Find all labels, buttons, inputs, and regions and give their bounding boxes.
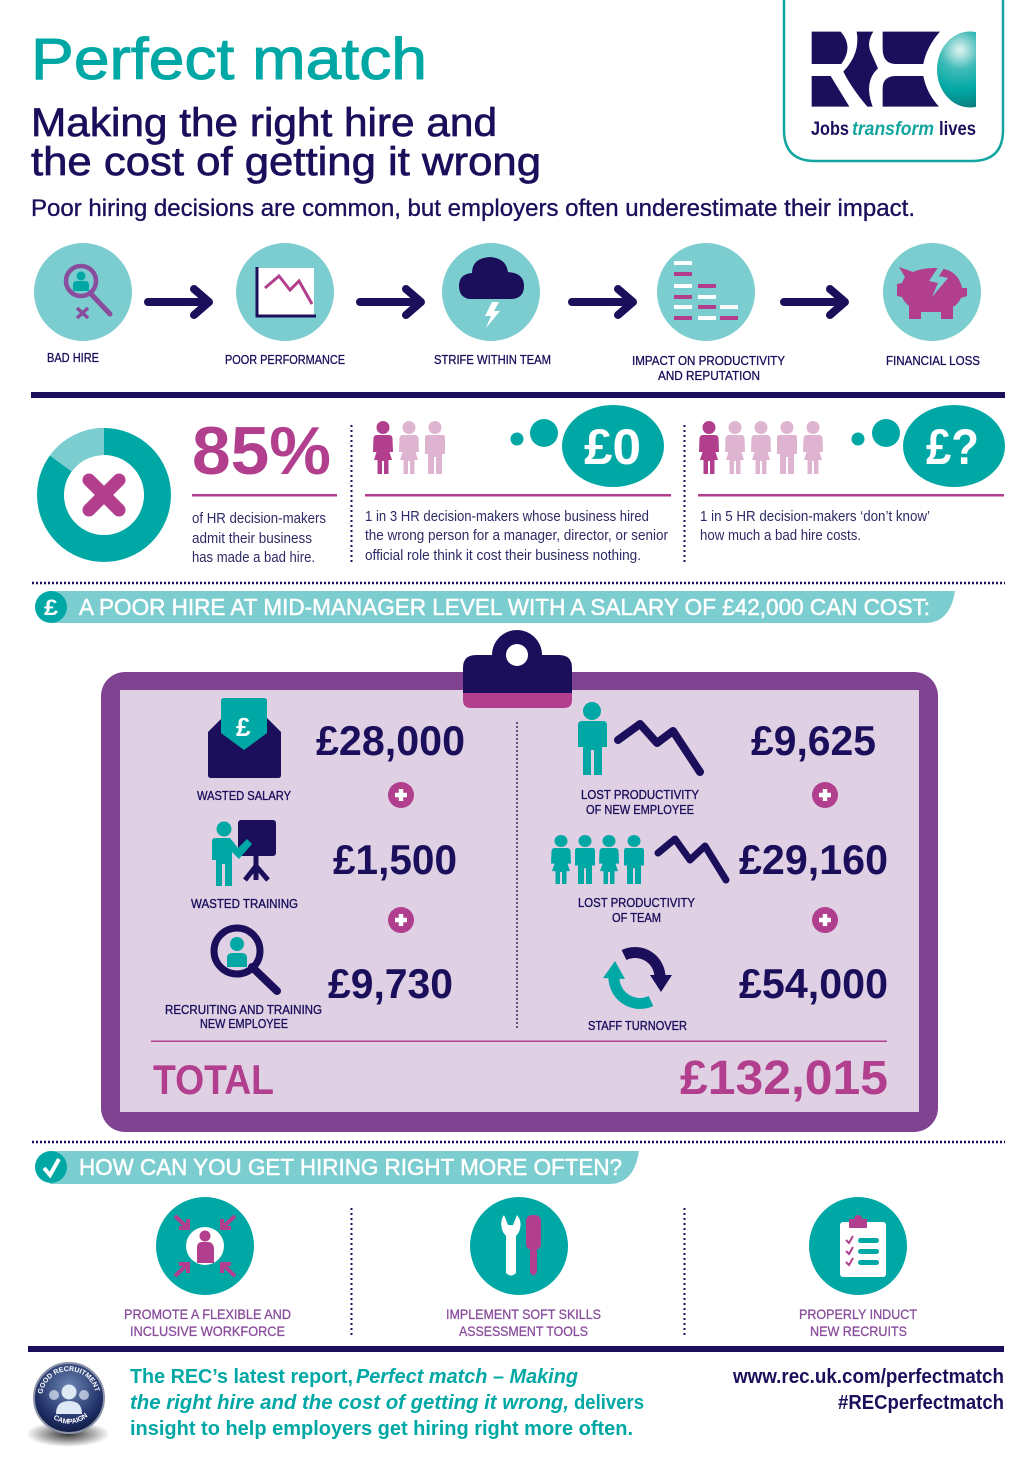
tip: soft skills tools [446,1197,601,1339]
item: lost productivity of team: £29,160 [739,836,888,883]
item: lost productivity of new employee: £9,625 [751,717,876,764]
badge: good recruitment campaign [28,1362,108,1446]
arrow [784,289,845,315]
tip: flexible and inclusive workforce: INCLUSIVE WORKFORCE [130,1323,285,1339]
stat: 1 in 5: how much a bad hire costs. [700,527,861,544]
banner: how to get it right: HOW CAN YOU GET HIRING RIGHT MORE OFTEN? [79,1154,622,1180]
stat: 85%: has made a bad hire. [192,549,315,566]
step: bad hire [34,243,132,365]
arrow [572,289,633,315]
tip: induct new recruits: PROPERLY INDUCT [799,1306,917,1322]
item: lost productivity of team: OF TEAM [612,910,661,925]
item: lost productivity of team [551,835,888,925]
badge: good recruitment campaign: GOOD RECRUITMENT [38,1366,100,1394]
plus [812,782,838,808]
footer links: www.rec.uk.com/perfectmatch [732,1366,1004,1388]
subtitle: Making the right hire and [31,101,497,145]
banner: cost heading: £ [44,595,59,620]
plus [388,907,414,933]
stat: 85% [192,413,337,566]
item: lost productivity of new employee: LOST PRODUCTIVITY [581,787,699,802]
item: lost productivity of new employee [578,702,876,817]
subtitle: the cost of getting it wrong [31,140,541,184]
clipboard board [101,672,938,1132]
total [153,1052,888,1105]
step: financial loss [883,243,981,368]
badge: good recruitment campaign: CAMPAIGN [54,1412,88,1424]
stat: 1 in 3: 1 in 3 HR decision-makers whose business hired [365,508,649,525]
item: lost productivity of team: LOST PRODUCTIVITY [578,895,695,910]
stat: 1 in 3: official role think it cost their business nothing. [365,547,641,564]
footer report text: delivers [574,1392,644,1414]
REC logo [784,0,1003,161]
item: recruiting and training new employee: £9,730 [328,960,453,1007]
footer report text: insight to help employers get hiring right more often. [130,1418,633,1440]
stat: 85%: 85% [192,413,331,489]
banner: cost heading: A POOR HIRE AT MID-MANAGER LEVEL WITH A SALARY OF £42,000 CAN COST: [79,594,930,620]
stat: 1 in 3: £0 [584,419,641,475]
stat: 85%: admit their business [192,530,312,547]
item: recruiting and training new employee [165,928,453,1031]
tip: induct new recruits [799,1197,917,1339]
step: poor performance: POOR PERFORMANCE [225,353,345,367]
stat: 85% donut icon [50,442,158,548]
plus [388,782,414,808]
step: strife within team: STRIFE WITHIN TEAM [434,353,551,367]
panel: clipboard cost breakdown [101,630,938,1132]
REC logo: Jobs [811,119,849,140]
step: financial loss: FINANCIAL LOSS [886,354,980,368]
item: recruiting and training new employee: RECRUITING AND TRAINING [165,1002,322,1017]
title: Perfect match [31,27,427,92]
item: wasted salary [197,698,465,803]
stat: 1 in 5: £? [926,419,979,475]
item: wasted salary: £ [236,712,251,742]
item: staff turnover: STAFF TURNOVER [588,1018,687,1033]
item: wasted training: WASTED TRAINING [191,896,298,911]
clipboard clip [463,630,572,708]
tip: soft skills tools: ASSESSMENT TOOLS [459,1323,588,1339]
step: impact on productivity and reputation: IMPACT ON PRODUCTIVITY [632,354,786,368]
item: wasted salary: £28,000 [316,717,465,764]
step: poor performance [225,243,345,367]
item: recruiting and training new employee: NEW EMPLOYEE [200,1016,288,1031]
tip: flexible and inclusive workforce [124,1197,291,1339]
item: wasted salary: WASTED SALARY [197,788,291,803]
REC logo: lives [939,119,976,140]
total: £132,015 [680,1052,888,1105]
tip: soft skills tools: IMPLEMENT SOFT SKILLS [446,1306,601,1322]
footer links [732,1366,1004,1414]
stat: 1 in 5: 1 in 5 HR decision-makers ‘don’t know’ [700,508,930,525]
step: impact on productivity and reputation [632,243,786,383]
item: wasted training [191,820,457,911]
total: TOTAL [153,1056,274,1103]
step: strife within team [434,243,551,367]
step: bad hire: BAD HIRE [47,351,99,365]
tip: flexible and inclusive workforce: PROMOTE A FLEXIBLE AND [124,1306,291,1322]
footer links: #RECperfectmatch [838,1392,1004,1414]
REC logo: transform [852,119,934,140]
stat: 85%: of HR decision-makers [192,510,326,527]
footer report text: Perfect match – Making [356,1366,578,1388]
item: staff turnover: £54,000 [739,960,888,1007]
stat: 1 in 3 [365,405,671,564]
step: impact on productivity and reputation: AND REPUTATION [658,369,760,383]
stat: 1 in 3: the wrong person for a manager, director, or senior [365,527,668,544]
item: lost productivity of new employee: OF NEW EMPLOYEE [586,802,694,817]
item: staff turnover [588,952,888,1033]
footer report text: the right hire and the cost of getting it wrong, [130,1392,569,1414]
arrow [360,289,421,315]
arrow [148,289,209,315]
footer report text [130,1366,644,1440]
footer report text: The REC’s latest report, [130,1366,353,1388]
tip: induct new recruits: NEW RECRUITS [810,1323,907,1339]
stat: 1 in 5 [698,405,1005,544]
subtitle [31,101,541,184]
plus [812,907,838,933]
intro sentence: Poor hiring decisions are common, but employers often underestimate their impact. [31,195,915,222]
item: wasted training: £1,500 [333,836,457,883]
